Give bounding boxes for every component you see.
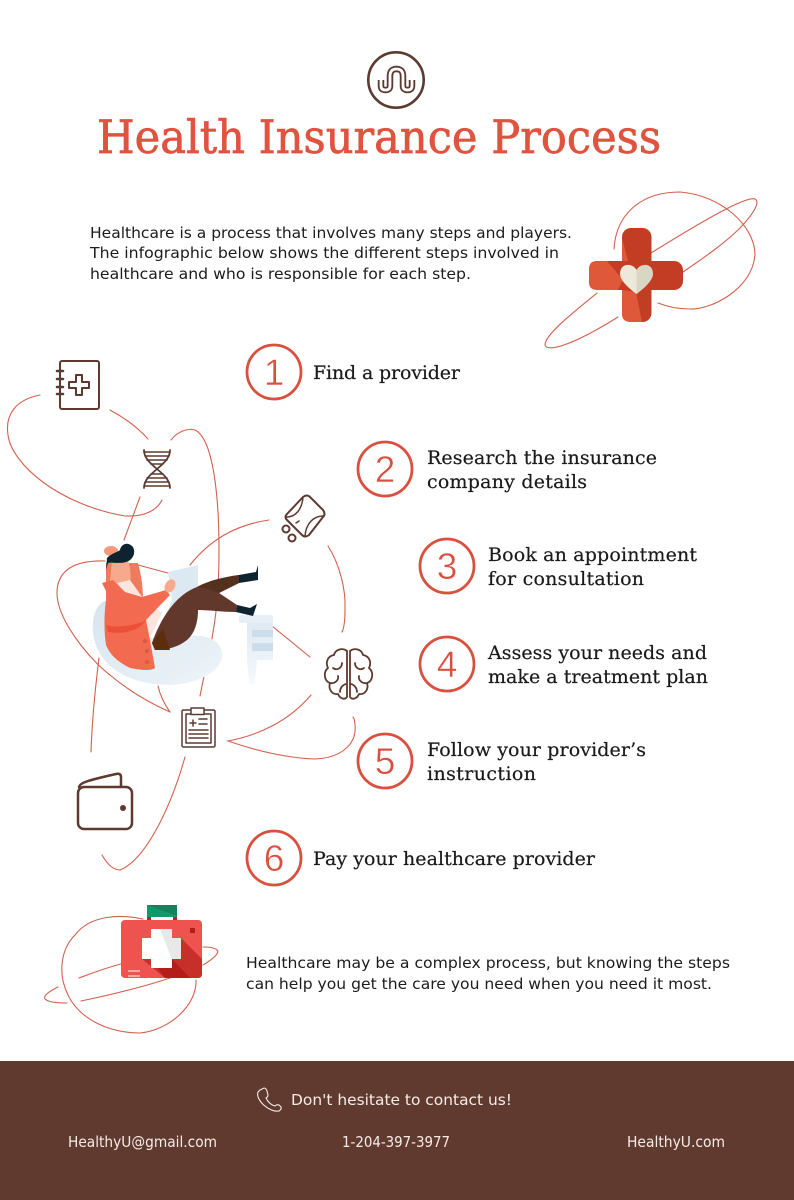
step 1: Find a provider (313, 362, 461, 384)
step 6 (247, 831, 596, 885)
icon: brain (325, 649, 372, 699)
title: Health Insurance Process (97, 110, 661, 164)
hair bun and fringe (104, 546, 118, 556)
step 4: 4 (437, 644, 457, 685)
step 2: 2 (375, 449, 395, 490)
closing text: can help you get the care you need when you need it most. (246, 975, 712, 993)
step 1: 1 (264, 352, 284, 393)
step 2 (358, 442, 657, 496)
step 6: Pay your healthcare provider (313, 848, 596, 870)
document (160, 565, 198, 640)
step 3: 3 (437, 546, 457, 587)
icon: clipboard (182, 708, 215, 747)
step 2: company details (427, 471, 587, 493)
phone number: 1-204-397-3977 (342, 1133, 450, 1151)
chair (93, 601, 222, 685)
intro text: Healthcare is a process that involves many steps and players. (90, 224, 572, 242)
step 6: 6 (264, 838, 284, 879)
hand (162, 577, 178, 595)
step 5: 5 (375, 741, 395, 782)
illustration: person reading on a chair (93, 544, 273, 685)
footer band (0, 1061, 794, 1200)
step 5 (358, 734, 646, 788)
step 3: for consultation (488, 568, 644, 590)
intro text (89, 224, 572, 283)
step 4 (420, 637, 708, 691)
step 3 (420, 539, 697, 593)
icon: notebook (57, 361, 99, 409)
closing text: Healthcare may be a complex process, but knowing the steps (246, 954, 730, 972)
boots (236, 565, 258, 616)
step 1 (247, 345, 461, 399)
closing text (246, 954, 730, 993)
icon: DNA helix (144, 450, 170, 488)
face (110, 560, 131, 586)
contact heading: Don't hesitate to contact us! (291, 1091, 512, 1109)
coat (102, 580, 170, 670)
side table (239, 615, 273, 684)
step 3: Book an appointment (488, 544, 697, 566)
step 5: instruction (427, 763, 536, 785)
trousers (152, 575, 239, 650)
step 4: make a treatment plan (488, 666, 708, 688)
icon: medicine pill pack (282, 496, 324, 542)
icon: wallet (78, 774, 132, 829)
connector curves (7, 395, 355, 870)
medical cross illustration with orbit lines (545, 192, 757, 348)
step 4: Assess your needs and (487, 642, 707, 664)
intro text: The infographic below shows the different steps involved in (89, 244, 559, 262)
logo icon (368, 52, 424, 108)
step 2: Research the insurance (427, 447, 657, 469)
long hair (106, 563, 143, 600)
website: HealthyU.com (627, 1133, 725, 1151)
intro text: healthcare and who is responsible for each step. (90, 265, 471, 283)
email: HealthyU@gmail.com (68, 1133, 217, 1151)
icon: phone (258, 1088, 281, 1111)
step 5: Follow your provider’s (427, 739, 646, 761)
first aid kit with orbit lines (45, 905, 218, 1033)
shirt (117, 580, 162, 642)
